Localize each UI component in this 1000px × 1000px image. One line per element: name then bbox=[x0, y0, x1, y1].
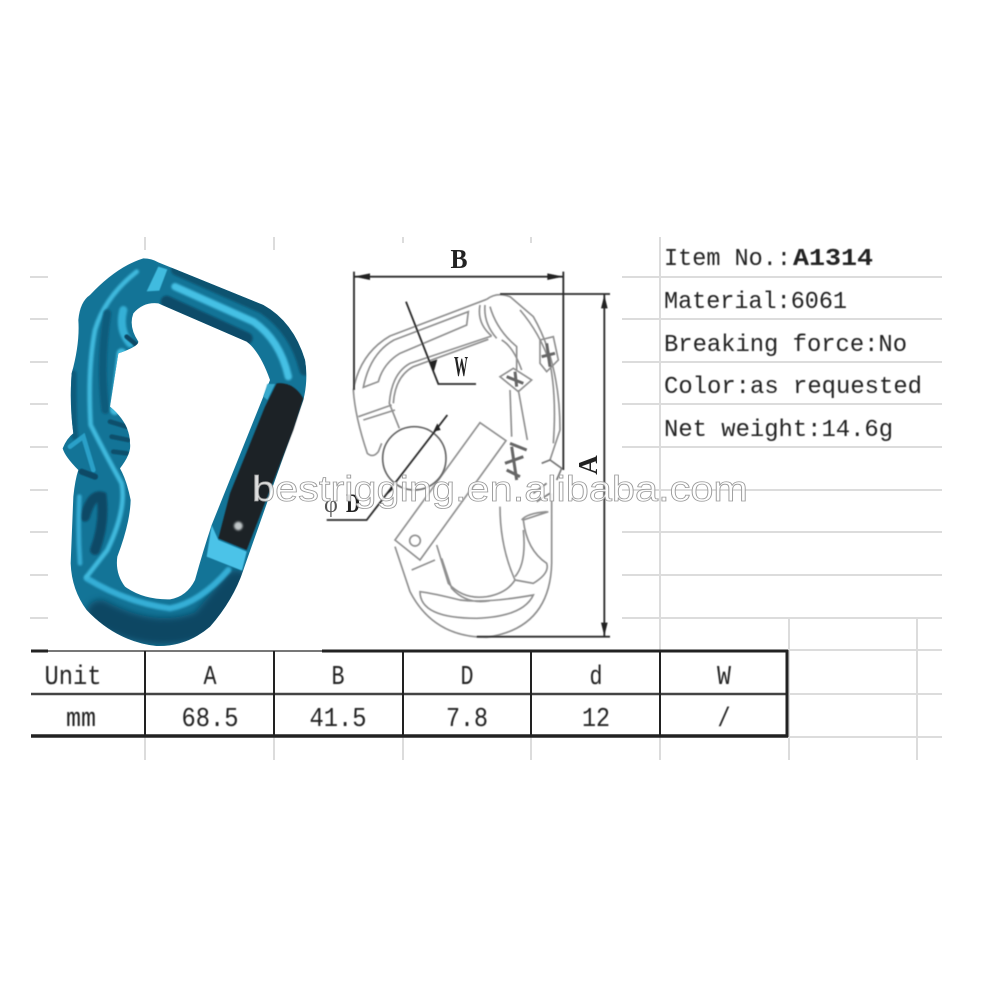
table borders bbox=[31, 650, 788, 737]
lower body outline bbox=[395, 493, 552, 637]
dimension lines bbox=[327, 272, 610, 637]
color: Color:as requested bbox=[664, 374, 922, 401]
technical line drawing bbox=[327, 272, 610, 637]
carabiner body bbox=[63, 258, 306, 646]
gate sleeve top bbox=[263, 384, 275, 400]
material: Material:6061 bbox=[664, 289, 847, 316]
table value row: 68.5 bbox=[182, 705, 238, 735]
gate rectangle bbox=[395, 423, 506, 560]
breaking force: Breaking force:No bbox=[664, 332, 907, 359]
infographic canvas bbox=[30, 237, 942, 760]
table header row: Unit bbox=[44, 663, 102, 693]
dimension label A: A bbox=[573, 455, 603, 475]
table header row: D bbox=[460, 663, 474, 693]
table value row: 12 bbox=[582, 705, 610, 735]
carabiner shading bbox=[70, 270, 305, 631]
carabiner gate bbox=[218, 383, 303, 550]
background grid bbox=[30, 237, 942, 760]
gate highlight bbox=[234, 522, 243, 530]
pin bbox=[410, 535, 420, 546]
table value row: mm bbox=[66, 705, 96, 735]
table header row: d bbox=[590, 663, 602, 693]
specifications list bbox=[664, 246, 922, 444]
dimension label W: W bbox=[454, 352, 468, 383]
arrowheads bbox=[354, 273, 608, 636]
knots bbox=[505, 343, 555, 480]
upper arm outline bbox=[353, 299, 497, 455]
dimension label phi D: φ bbox=[324, 492, 338, 518]
item number: Item No.: bbox=[664, 246, 791, 273]
right spine outline bbox=[487, 295, 560, 460]
table header row: W bbox=[717, 663, 732, 693]
table value row: 41.5 bbox=[310, 705, 366, 735]
table header row: A bbox=[204, 663, 217, 693]
top collar bbox=[147, 267, 167, 291]
table value row bbox=[66, 705, 730, 735]
table value row: 7.8 bbox=[446, 705, 488, 735]
net weight: Net weight:14.6g bbox=[664, 417, 893, 444]
wire circle d bbox=[383, 427, 446, 490]
hook detail bbox=[533, 460, 562, 502]
dimension label D: D bbox=[346, 489, 360, 518]
dimension label B: B bbox=[450, 244, 468, 274]
table header row bbox=[44, 663, 732, 693]
table header row: B bbox=[332, 663, 344, 693]
gate sleeve bbox=[207, 525, 247, 571]
dimensions table bbox=[31, 650, 788, 737]
watermark: bestrigging.en.alibaba.com bbox=[252, 468, 748, 509]
carabiner photo bbox=[63, 258, 306, 646]
table value row: / bbox=[718, 705, 730, 735]
item number value: A1314 bbox=[793, 246, 873, 273]
